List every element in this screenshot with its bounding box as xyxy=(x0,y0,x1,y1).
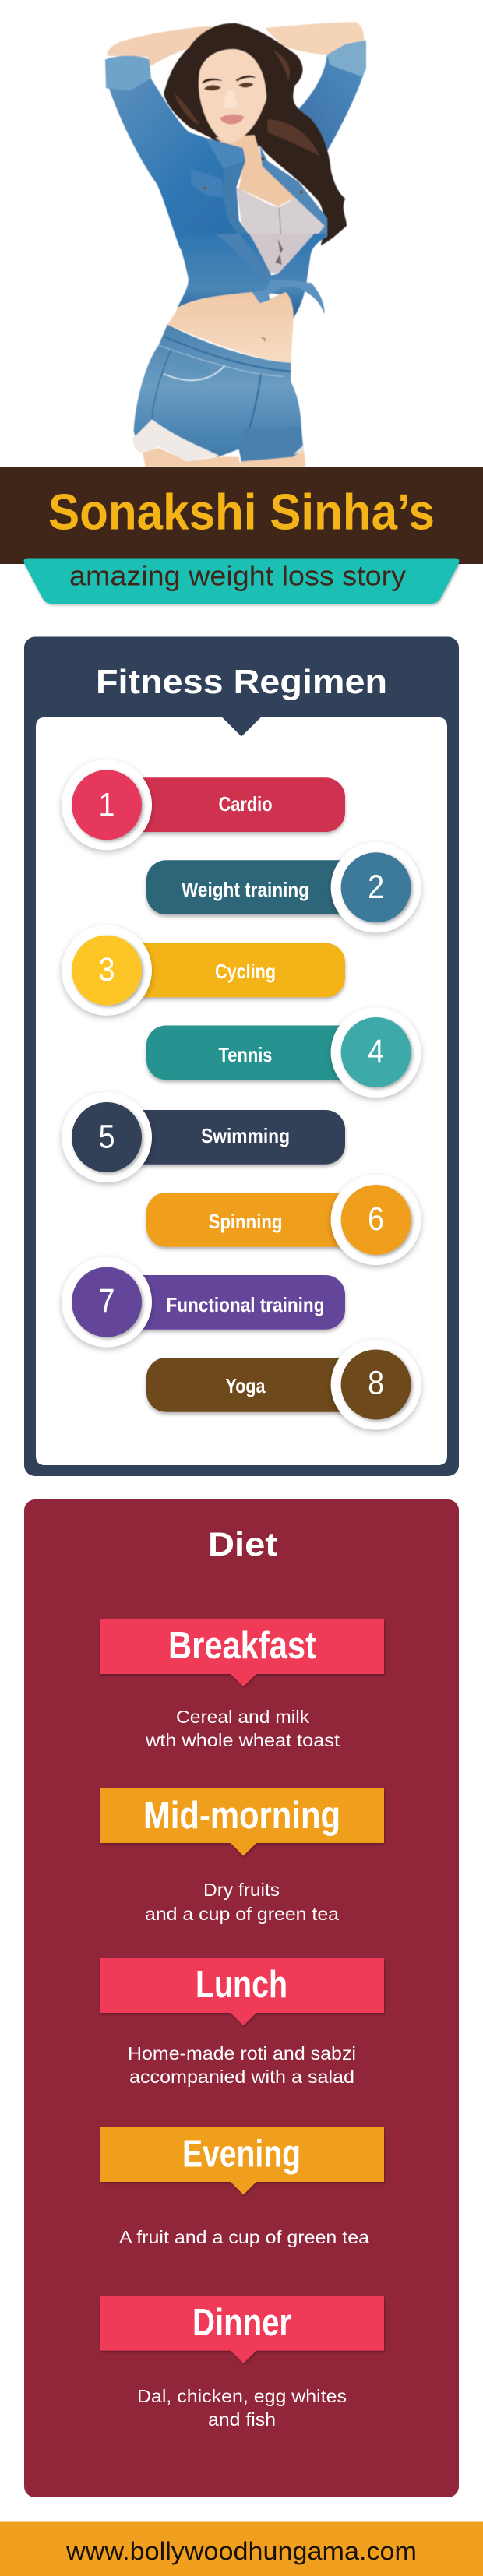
subtitle ribbon xyxy=(24,558,459,604)
item 4: tennis: Tennis xyxy=(218,1043,273,1066)
panel: fitness regimen xyxy=(24,637,459,1476)
item 7: functional training: 7 xyxy=(98,1282,115,1320)
meal: mid-morning: Mid-morning xyxy=(143,1795,340,1837)
meal: dinner: Dinner xyxy=(192,2302,291,2344)
item 8: yoga: 8 xyxy=(368,1365,384,1402)
item 8: yoga xyxy=(146,1340,421,1430)
item 6: spinning: Spinning xyxy=(209,1210,282,1233)
item 1: cardio: 1 xyxy=(98,787,115,824)
meal: breakfast: Cereal and milk xyxy=(176,1707,309,1727)
item 2: weight training xyxy=(146,842,421,932)
meal: breakfast xyxy=(100,1619,384,1750)
footer url: www.bollywoodhungama.com xyxy=(65,2537,417,2565)
heading: diet: Diet xyxy=(208,1526,277,1563)
heading: fitness regimen: Fitness Regimen xyxy=(96,663,387,701)
item 8: yoga: Yoga xyxy=(226,1374,266,1397)
meal: breakfast: Breakfast xyxy=(168,1625,316,1667)
meal: lunch: Home-made roti and sabzi xyxy=(128,2043,356,2063)
item 7: functional training: Functional training xyxy=(167,1293,324,1316)
item 7: functional training xyxy=(62,1257,345,1348)
item 2: weight training: 2 xyxy=(368,869,384,906)
item 6: spinning: 6 xyxy=(368,1200,384,1238)
item 5: swimming: Swimming xyxy=(201,1124,290,1147)
item 1: cardio: Cardio xyxy=(218,792,273,816)
meal: evening: Evening xyxy=(182,2133,301,2175)
white inner card xyxy=(36,717,447,1465)
meal: mid-morning: Dry fruits xyxy=(203,1880,280,1900)
footer xyxy=(0,2522,483,2576)
meal: lunch: accompanied with a salad xyxy=(129,2067,354,2087)
item 4: tennis xyxy=(146,1007,421,1098)
item 2: weight training: Weight training xyxy=(182,878,309,901)
photo: woman in denim shirt and shorts xyxy=(105,22,366,467)
meal: breakfast: wth whole wheat toast xyxy=(145,1730,340,1750)
meal: evening xyxy=(100,2127,384,2247)
title text: Sonakshi Sinha’s xyxy=(48,483,435,540)
item 3: cycling: Cycling xyxy=(215,960,276,983)
item 5: swimming: 5 xyxy=(98,1119,115,1156)
meal: lunch xyxy=(100,1958,384,2087)
item 6: spinning xyxy=(146,1175,421,1265)
item 4: tennis: 4 xyxy=(368,1033,384,1070)
meal: dinner: Dal, chicken, egg whites xyxy=(137,2386,347,2406)
item 3: cycling: 3 xyxy=(98,951,115,988)
meal: dinner xyxy=(100,2296,384,2430)
panel: diet xyxy=(24,1499,459,2497)
item 3: cycling xyxy=(62,925,345,1016)
item 1: cardio xyxy=(62,759,345,850)
subtitle text: amazing weight loss story xyxy=(69,560,406,592)
item 5: swimming xyxy=(62,1092,345,1182)
title banner xyxy=(0,467,483,564)
meal: evening: A fruit and a cup of green tea xyxy=(119,2227,370,2247)
meal: lunch: Lunch xyxy=(196,1964,287,2006)
meal: mid-morning: and a cup of green tea xyxy=(145,1904,340,1924)
meal: mid-morning xyxy=(100,1788,384,1924)
meal: dinner: and fish xyxy=(208,2409,276,2430)
